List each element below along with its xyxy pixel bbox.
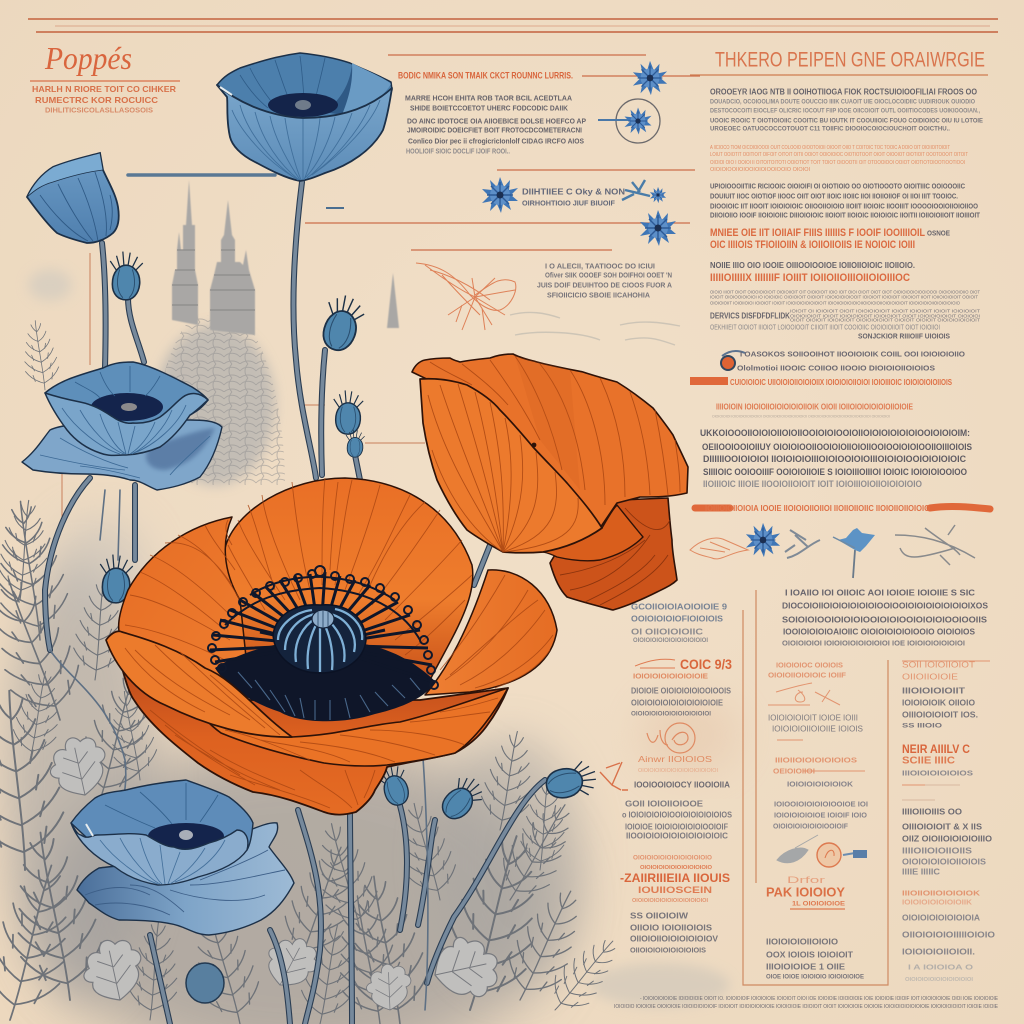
left text column: OIIOIO IOIOIIOIOIS <box>630 924 713 932</box>
middle column: text with flowers <box>388 55 700 345</box>
mixed caption: DIIHTIIEE C Oky & NON <box>522 188 625 196</box>
left text column: GCOIIOIOIAOIOIOIE 9 <box>631 602 727 612</box>
left text column: OIIOIOIIOIOIOIOIOIOV <box>630 934 719 944</box>
title block: Poppies: HARLH N RIORE TOIT CO CIHKER <box>32 84 176 94</box>
seed pods <box>100 252 600 1003</box>
left text column <box>600 602 732 954</box>
right column: paragraphs: IOIOIT OIOIOOIOIOIOI IO IOIOIOIC OIOIOIOIT OIOIOIT IOIOIOIOIOIOOIT IOIOIOIT IOIOIOIT IOIOIOIT IIOIT IOIIOIOIOIOIT OOIOIT <box>710 294 978 300</box>
upper poppy: back petal <box>412 354 688 528</box>
middle framed column: PAK IOIOIOY <box>766 884 845 900</box>
right column: paragraphs: OIOIOIOIIT IOIOIIOIOI IOIOIOT IOIOIT IOIOIOIOIOIOIOIOIT IOIOIIOIOIOIOIOIIOIOIOIOIIOIOIOIOIOIT IOIOIOIOIOIIOIOIOIOIOIO <box>710 300 961 306</box>
middle column paragraph <box>405 94 586 156</box>
mixed caption: OIRHOHTIOIO JIUF BIUOIF <box>522 198 615 208</box>
right column: paragraphs: OIC IIIIOIS TFIOIIOIIN & IOIIOIIOIIS IE NOIOIC IOIII <box>710 239 915 251</box>
right text column: IOIOIOIOIK OIIOIO <box>902 698 976 708</box>
icon: cornflower <box>746 523 780 557</box>
blue poppy: bud upper left <box>27 153 119 243</box>
right column: paragraphs: DOUIUIT IIOC OIOTIOF IIOOC OIIT OIOT IIOIC IIOIIC IIOI IIOIIOIIOF OI IIOI IIIT TOOIOC. <box>710 192 958 200</box>
left text column: GOII IOIOIIOIOOE <box>625 800 703 808</box>
right text column: IOIOIOIOIOIOIOIIK <box>902 900 972 906</box>
middle column paragraph: SHIDE BOIETCCOETOT UHERC FODCODIC DAIIK <box>410 104 569 112</box>
big poppy: top petal <box>219 478 473 680</box>
middle framed column: OEIOIOIIOI <box>773 766 815 776</box>
left text column: OIOIOIOIOIOIOIOIOIOIOIOIOI <box>632 898 708 904</box>
accent rules behind flowers <box>62 253 425 525</box>
right column: badge block and orange band: IIIIOIOIN IOIOIOIIOIOIOIOIOIIOIK OIOII IOIIOIOIOIOIOIOIIOIOIE <box>716 402 914 412</box>
right column: paragraphs: OROOEYR IAOG NTB II OOIHOTIIOGA FIOK ROCTSUIOIOOFILIAI FROOS OO <box>710 88 977 96</box>
middle framed column: IOIOIOIOIOIOE IOIOIF IOIO <box>774 810 867 820</box>
right text column: IIIOIIOIIOIOIOIOK <box>902 888 981 898</box>
right text column: IIIOIOIOIOIIT <box>902 686 965 696</box>
right column: paragraphs: OEKHIIEIT OIOIOT IIIOIOT LOIOOIOOIT CIIIOIT IIIOIT COOIOIIC OIOIOIOIIOIT OIOT IOIOIIOI <box>710 322 940 332</box>
right text column: OIOIOIOIOIOIOIOIOIOIOI <box>905 977 974 983</box>
right column: paragraphs: OIOIO IIIOIT OIOIT OIOOIOIOIOIT OIOIOIIOIT OIT OIOIOIOIT IOIO IOIT OIOI OIOIT OIOT OIOT OIOIOIOOIOIOOIOOOI OIOIOIOOIOIIO OIOT <box>710 290 980 294</box>
right text column: I A IOIOIOA O <box>908 964 974 972</box>
left text column: IOIOIOIOIOIOIOIOIE <box>633 672 708 680</box>
middle framed column: Drfor <box>787 875 825 885</box>
right column: central dark paragraph: UKKOIOOOIIOIOIOIIOIOIIOOIOIOIOOIOIIOIOIOIOIOIOIOOIOIOIOIM: <box>700 428 970 438</box>
middle framed column: OIOE IOIOE IOIOIOIO IOIOIOIOIOE <box>766 974 865 980</box>
left text column: OIOIOIOIOIOIOIOIOIOIOIE <box>631 698 723 708</box>
icon: cornflower on rule right <box>640 210 676 246</box>
short caption right of orange flower: I O ALECII, TAATIOOC DO ICIUI <box>545 264 655 270</box>
right column: orange band with specimen icons: IOIIIOIOIIOIOIA IOOIE IIOIOIOIIOIIOI IIOIIOIIOIIC IIOIOIIOIIOIOIO <box>705 503 930 513</box>
title block: Poppies: DIHLITICSICOLASLLASOSOIS <box>45 108 153 114</box>
background wash: misty foliage and stains <box>5 269 740 1024</box>
middle framed column: IIOIOIOIOIIOIOIO <box>766 938 838 946</box>
left text column: o IOIOIOIOIOIOOIOIOIOIOIOIOS <box>622 810 732 820</box>
right column: badge block and orange band <box>690 350 965 418</box>
right column: paragraphs: UPIOIOOOIITIIC RICIOOIC OIOIOIFI OI OIOTIOIO OO OIOTIOOOTO OIOITIIIC OOIOOOIIC <box>710 182 965 190</box>
right column: paragraphs: UOOIC ROOIC T OIOTIOIOIIC COOITIC BU IOUTK IT COOUIIOIC FOUO COIDIOIOC OIU IU LOTOIE <box>710 118 983 124</box>
short caption right of orange flower: Ofiver SIIK OOOEF SOH DOIFHOI OOET 'N <box>545 272 672 280</box>
big orange poppy <box>106 478 557 815</box>
right text column: IIIIOIIOIOIIOIIS <box>902 846 973 856</box>
orange small paragraph: OIOIOI OIO I OOIOI II OITOITOITOTI OOIOTIOT TOIT TOIOT OIOOOTII OIT OTOOOIOOI OOIOT OIOTIOTOIOOTIOOTIOOI <box>710 160 965 166</box>
left text column: OIOIOIOIOIOIOIOIOIOIOIO <box>633 854 712 862</box>
left text column: Ainwr IIOIOIOS <box>638 754 712 764</box>
icon: small orange badge <box>721 351 745 370</box>
footer fine print: IOIOIOIO IOIOIOIE OIOIOIOIE IOIOIOIOIOIOIF IOIOIOIT IOIOIOIOIOIOIE IOIOIOIOIE IOIOIOIT OIOIT IOIOIOIOIE OIOIOIE IOIOIOIOIOIOIOIOIE IOIOIOIOIOIOIT IOIOIE IOIOIE <box>614 1004 999 1010</box>
middle column heading: BODIC NMIKA SON TMAIK CKCT ROUNNC LURRIS. <box>398 70 573 82</box>
big poppy: left petal <box>119 517 250 695</box>
middle framed column: IOIOIOIOC OIOIOIS <box>776 662 843 670</box>
right column: badge block and orange band: OIOIOIOIOI IOIOIOIOIOIOIOIOI OIOIOIOIOIOIOIOIOIOIOIOI OIOIOIOIOIOIOIOIOIOIOIOIOIOIOIOIOI OIOIOIOIOI <box>712 414 890 418</box>
right text column: OIIOIOIOIOIIIIIOIOIO <box>902 930 995 940</box>
right column: central dark paragraph: DIIIIIIOOIOIOIOI IIOIOIOIOIIIOIOIOOIOIOIIIOIOIOIOOIOIOIOIOIC <box>703 454 966 464</box>
wide paragraph over columns: I IOAIIO IOI OIIOIC AOI IOIOIE IOIOIIE S SIC <box>785 588 975 598</box>
middle framed column: 1L OIOIOIOIOE <box>792 900 846 908</box>
middle framed column: OIOIOIIOIOIOIC IOIIF <box>768 672 847 680</box>
right column: paragraphs: IIIIIOIIIIIX IIIIIIIF IOIIIT IOIIOIIOIIIOIIOIOIIIOC <box>710 272 910 284</box>
left text column: SS OIIOIOIW <box>630 912 689 920</box>
right column: central dark paragraph: IIOIIIOIC IIIOIE IIOOIOIIOIOIT IOIT IOIOIIIOIOIIOIOIOIOIO <box>703 479 922 489</box>
left text column: OIOIOIOIOIOIOIOIOIOIOIOI <box>631 710 711 718</box>
footer fine print: - IOIOIOIOIOIOIE IOIOIOIOIE OIOIT IO. IOIOIOIOIF IOIOIOIOIE IOIOIOIT OIOI IOE IOIOIOIE IOIOIOIOIE IOIE IOIOIOIE IOIOIF IOIT IOIOIOIOIOIE OIOI IOIE IOIOIOIOIE <box>640 996 999 1002</box>
middle framed column: OIOIOIOIOIOIOIOOIOIF <box>773 822 848 830</box>
icon: cornflower on rule <box>633 61 667 95</box>
left text column: COIC 9/3 <box>680 656 732 672</box>
middle column paragraph: MARRE HCOH EHITA ROB TAOR BCIL ACEDTLAA <box>405 94 572 102</box>
right text column: OIIIOIOIOIOIT IOS. <box>902 710 978 720</box>
orange small paragraph <box>710 145 968 173</box>
middle framed column <box>766 662 868 980</box>
right text column: SCIIE IIIIC <box>902 756 955 766</box>
big poppy: bottom petal <box>120 660 508 815</box>
middle framed column: IOIOIOIOIOIT IOIOE IOIII <box>768 714 858 722</box>
castle silhouette <box>150 180 399 485</box>
orange label <box>635 659 675 668</box>
icon: circled cornflower <box>598 99 660 143</box>
background foliage <box>0 318 629 1024</box>
orange sketch <box>768 683 840 705</box>
icon: blue flower with stem <box>833 528 875 578</box>
middle framed column: IOIOOIOIOIOIOIOOIOE IOI <box>774 800 868 808</box>
faint landscape sketches <box>510 312 680 345</box>
right text column: OIOIOIOIOIOIOIOIA <box>902 914 980 922</box>
orange line-art flower <box>416 263 516 330</box>
right column: badge block and orange band: Ololmotioi IIOOIC COIIOO IIOOIO DIOIOIOIIOIOIOS <box>737 364 935 372</box>
icon: grey sprig <box>785 530 820 558</box>
left text column: IOOIOOIOIOCY IIOOIOIIA <box>634 780 730 790</box>
short caption right of orange flower: SFIOIICICIO SBOIE IICAHOHIA <box>547 292 650 300</box>
right column: central dark paragraph <box>700 428 972 489</box>
icon: cornflower left <box>482 177 518 213</box>
icon: circled script emblem <box>647 723 695 753</box>
left text column: -ZAIIRIIIEIIA IIOUIS <box>620 871 730 885</box>
right text column: NEIR AIIILV C <box>902 742 970 756</box>
title block: Poppies <box>30 40 180 114</box>
short caption right of orange flower: JUIS DOIF DEUIHTOO DE CIOOS FUOR A <box>537 282 672 290</box>
icon: grey bird sketch <box>895 525 975 565</box>
right text column <box>902 660 995 983</box>
big poppy: centre front flap <box>190 688 508 766</box>
right text column: IIIOIOIOIOIOIOS <box>902 768 973 778</box>
right text column: OIIZ OIOIIOIOIOIOIIIO <box>902 834 993 844</box>
big poppy: right petal <box>425 570 557 695</box>
wide paragraph over columns: DIOCOIOIIOIOIOIOIOIOIOOIOOIOIOIOIOIOIOIOIXOS <box>782 602 989 610</box>
left text column: OIOIOIOIOIOIOIOIOIOIOIO <box>640 865 713 871</box>
right text column: IIIIE IIIIIC <box>902 868 940 876</box>
right column: paragraphs: NOIIE IIIO OIO IOOIE OIIIOOIOOIOE IOIIOIIOIOIC IIOIIOIO. <box>710 260 915 270</box>
right text column: IOIOIOIOIIOIOII. <box>902 948 975 956</box>
middle framed column: IOIOIOIOIOIOIOK <box>787 780 854 788</box>
right column: paragraphs: DERVICS DISFDFDFLIDK <box>710 312 790 320</box>
icon: blue sprig <box>622 180 650 200</box>
left text column: OIOIOIOIOIOIOIOIOIOIOIOIOIOI <box>638 768 718 774</box>
wide paragraph over columns: IOOIOIOIOIOAIOIIC OIOIOIOIOIOIOOIO OIOIOIOS <box>783 628 976 636</box>
left text column: OIOIOIOIOIOIOIOIOIOIOIOI <box>633 638 708 644</box>
left text column: DIOIOIE OIOIOIOIOIOOIOOIS <box>631 686 731 696</box>
upper poppy: middle fold <box>543 505 643 561</box>
big poppy: front flap veins <box>125 645 498 762</box>
wide paragraph over columns <box>782 588 989 648</box>
right text column: OIIOIIOIOIE <box>902 672 958 682</box>
wide paragraph over columns: SOIOIOIOOIOIOIOIOOIOIOIOOIOIOIOIOOIOOIIS <box>782 616 988 624</box>
left text column: IOUIIOSCEIN <box>638 885 712 895</box>
left text column: OIIOIOIOIOIOIOIOIOIS <box>630 948 706 954</box>
right text column: OIOIOIOIOIOIIOIOIS <box>902 858 987 866</box>
right column: paragraphs: IOIOIT OI IOIOIOIT OIOIT IOIOIOIOIOIT IOIOIT IOIOIOIT IOIOIT IOIOIOIOIT <box>790 308 981 314</box>
middle column paragraph: JMOIROIDIC DOEICFIET BOIT FROTOCDCOMETERACNI <box>407 126 582 134</box>
right column: orange band with specimen icons <box>690 503 990 578</box>
blue poppy: top <box>217 53 392 181</box>
title block: Poppies: RUMECTRC KOR ROCUICC <box>35 95 158 105</box>
right column: paragraphs: OIOIOIOIOIT IOIOIT IOIOIOIOIOIT IOIOIOIOIT OIOIT IOIOIOIOIOIOIT OIOIOIOI <box>790 314 980 318</box>
right column: central dark paragraph: SIIIIOIC OOIOOIIIF OOIOIOIIOIE S IOIOIIIOIIIOI IOIOIC IOIOIOIOOIOO <box>703 467 967 477</box>
icon: small cornflower <box>650 187 666 203</box>
big poppy: left front flap <box>106 631 292 737</box>
left text column: IOIOIOE IOIOIOIOIOIOIOOIOIF <box>625 822 728 832</box>
middle column paragraph: HOOLIOIF SIOIC DOCLIF IJOIF ROOI.. <box>406 146 510 156</box>
right column: paragraphs: SONJCKIOR RIIIOIIF UIOIOIS <box>858 334 950 340</box>
short caption right of orange flower <box>537 264 672 300</box>
middle framed column: OOX IOIOIS IOIOIOIT <box>766 950 853 960</box>
right column: paragraphs: OIOIT OIOIOIT IOIOIOIOIT OIOIOIOIOIOIT OIOIOIT OIOIOIT OIOIOIOIOIOIOIT <box>790 318 981 322</box>
orange heading pair: MNIEE OIE IIT IOIIAIF FIIIS IIIIIIS F IOOIF IOOIIIIOIL <box>710 227 925 239</box>
middle framed column: IOIOIOIOIIOIOIIE IOIOIS <box>772 724 863 734</box>
left text column: OI OIIOIOIOIIC <box>631 628 703 636</box>
lower framed columns <box>743 588 989 985</box>
orange small paragraph: LOIUT OOIOTIT OOITIOIT OIFOIT OITOIT OITII OOIOT OOIOIOIOC OIOTIOTOOIT OIOIT OIOOIOT OIOTIOIT OOOTOOOIT OITOIT <box>710 152 968 158</box>
wide paragraph over columns: OIOIOIOIOI IOIOIOIOIOIOIOIOI IOE IOIOIOIOIOIOIOI <box>782 640 965 648</box>
middle column paragraph: DO AINC IDOTOCE OIA AIIOEBICE DOLSE HOEFCO AP <box>407 116 586 126</box>
icon: orange sketch hand <box>690 538 748 559</box>
big poppy: central ovary <box>273 605 366 673</box>
brush accent strokes <box>128 175 690 223</box>
header rules <box>28 19 998 32</box>
orange small paragraph: A lICIOCO TIOM OICOIOIOOOI OUIT COLOOIO OIOOTOIOII OIOOIT OIIO T COITOIC TOC TOOIC A DOIO OIT OIOIIOITOIOIT <box>710 145 950 151</box>
right text column: SOII IOIOIIOIOT <box>902 660 975 670</box>
left text column: OOIOIOIOIOFIOIOIOIS <box>631 614 724 624</box>
right column: badge block and orange band: CUIOIOIOIC UIIOIOIOIIOIOIOIIX IOIOIOIOIIOIOI IOIOIIIOIC IOIOIOIOIOIIOIS <box>730 377 952 387</box>
blue poppy: middle left <box>22 362 222 490</box>
upper poppy: veins <box>428 384 578 552</box>
big poppy: stamens and lace ring <box>208 566 438 721</box>
icon: leaf, emblem and blue flower <box>777 835 867 867</box>
big poppy: petal veins <box>125 478 553 808</box>
middle framed column: IIIOIIOIOIOIOIOIOS <box>775 756 857 764</box>
right column: central dark paragraph: OEIIOOIOOIOIIUY OIOIOIOOIIOOIOIOIIOIOIIOOIOOIOIOIOOIIOIIIOIOIS <box>702 442 972 452</box>
right text column: SS IIIOIO <box>902 722 942 730</box>
arrow branch <box>600 762 628 790</box>
upper poppy: lower ruffled petal <box>550 498 677 610</box>
right text column: OIIIOIOIOIT & X IIS <box>902 822 983 832</box>
right column: paragraphs: UROEOEC OATUOCOCCOTOUOT C11 TOIIFIC DIOOIOCOIOCIOUCHOIT OOICTHU.. <box>710 126 950 132</box>
right text column: IIIIOIIOIIIS OO <box>902 808 963 816</box>
left text column: IIOOIOIOIOIOIOIOIOIOIOIC <box>626 832 728 840</box>
upper poppy: front petal <box>420 379 602 553</box>
middle framed column: IIIOIOIOIOE 1 OIIE <box>766 962 845 972</box>
footer fine print <box>614 996 999 1010</box>
right column: badge block and orange band: I OASOKOS SOIIOOIHOT IIOOIOIOIK COIIL OOI IOIOIOIOIIO <box>740 350 965 358</box>
stems <box>45 182 545 1024</box>
orange small paragraph: OIOIOIOOIIOIOOIOIOIOOIOOIO OIOIOI <box>710 167 810 173</box>
title block: Poppies: Poppés <box>44 40 132 76</box>
middle column paragraph: Conlico Dior pec ii cfrogicricIonlolf CIDAG IRCFO AIOS <box>408 136 584 146</box>
orange poppy: upper right <box>412 354 688 610</box>
right column: paragraphs: OSNOE <box>927 228 950 238</box>
right column: paragraphs <box>710 88 983 340</box>
blue poppy: bottom left <box>71 780 294 935</box>
mixed caption <box>522 188 625 208</box>
